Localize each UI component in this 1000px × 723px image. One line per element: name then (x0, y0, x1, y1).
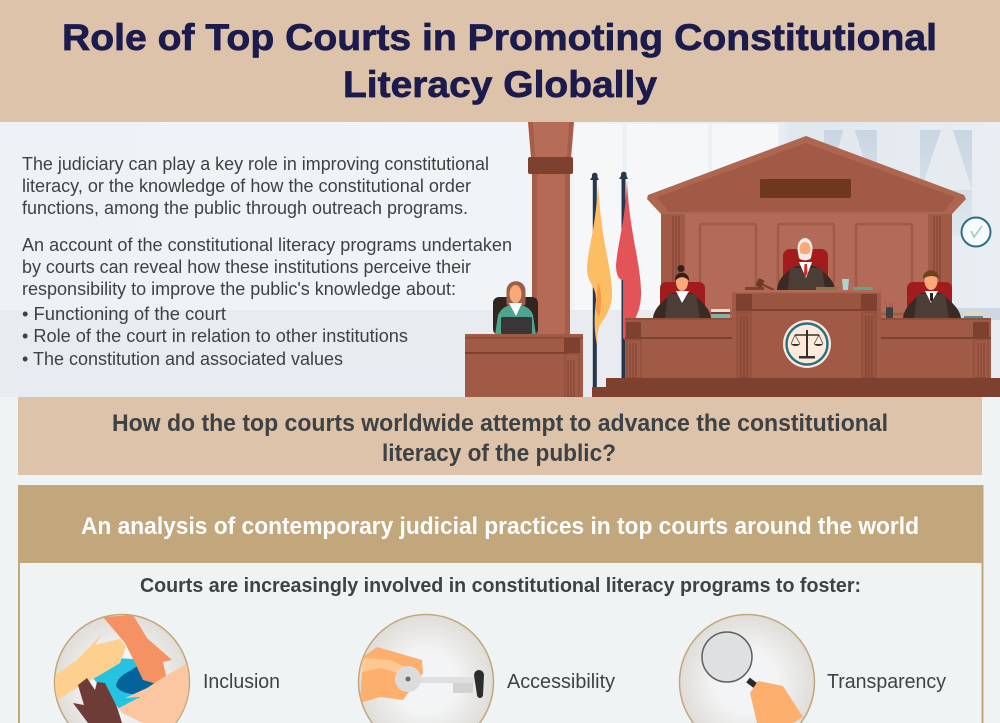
hero background room (0, 122, 1000, 397)
platform steps (592, 378, 1000, 397)
panel heading (18, 485, 984, 563)
courtroom illustration (465, 122, 1000, 397)
label: accessibility: Accessibility (507, 671, 615, 693)
clerk (493, 281, 538, 335)
intro text block (22, 154, 512, 369)
books and gavel (711, 278, 983, 318)
pillar (528, 122, 574, 335)
intro text block: An account of the constitutional literacy programs undertaken (22, 235, 512, 255)
intro text block: functions, among the public through outreach programs. (22, 198, 468, 218)
panel subheading: Courts are increasingly involved in constitutional literacy programs to foster: (140, 574, 861, 597)
central bench (732, 290, 881, 378)
label: transparency: Transparency (827, 671, 946, 693)
question band (18, 397, 982, 475)
panel heading: An analysis of contemporary judicial practices in top courts around the world (81, 513, 919, 540)
title: Role of Top Courts in Promoting Constitutional (62, 17, 937, 58)
label: inclusion: Inclusion (203, 671, 280, 693)
right judge (903, 270, 961, 322)
judicial bench canopy (647, 136, 966, 325)
clerk desk (465, 334, 583, 397)
intro text block: • The constitution and associated values (22, 349, 343, 369)
intro text block: literacy, or the knowledge of how the constitutional order (22, 176, 471, 196)
left judge (653, 265, 711, 322)
intro text block: by courts can reveal how these institutions perceive their (22, 257, 471, 277)
title: Literacy Globally (343, 64, 657, 105)
intro text block: responsibility to improve the public's knowledge about: (22, 279, 456, 299)
bench desks (625, 318, 991, 378)
intro text block: The judiciary can play a key role in improving constitutional (22, 154, 489, 174)
icon: accessibility key and hand (358, 614, 494, 723)
title (62, 17, 937, 105)
question band: literacy of the public? (382, 440, 616, 467)
panel: analysis (18, 485, 984, 723)
header band (0, 0, 1000, 122)
intro text block: • Role of the court in relation to other institutions (22, 326, 408, 346)
intro text block: • Functioning of the court (22, 304, 226, 324)
flags (587, 172, 641, 397)
icon: inclusion hands and globe (54, 614, 190, 723)
chief judge (777, 238, 835, 294)
seal: scales of justice (783, 320, 831, 368)
clock (960, 216, 992, 248)
question band: How do the top courts worldwide attempt to advance the constitutional (112, 410, 888, 437)
icon: transparency magnifying glass (680, 614, 814, 723)
